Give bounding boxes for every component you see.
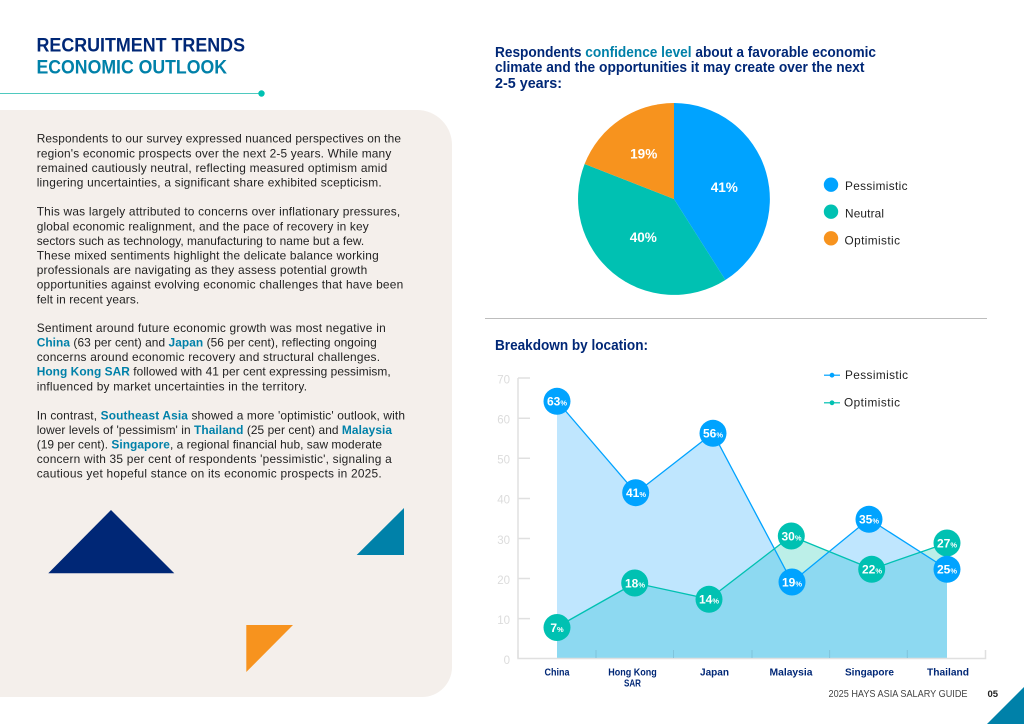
y axis labels: 10 <box>497 615 510 627</box>
y axis labels: 60 <box>497 414 510 426</box>
slice: optimistic 19% <box>585 103 674 199</box>
marker values: 63% <box>547 394 567 408</box>
area line chart <box>497 374 986 689</box>
marker values <box>547 394 957 635</box>
line: pessimistic <box>557 401 947 582</box>
marker values: 35% <box>859 512 879 526</box>
paragraph: southeast asia contrast: (19 per cent). Singapore, a regional financial hub, saw moderate <box>37 438 382 452</box>
pie value labels: 41% <box>711 180 738 195</box>
paragraph: most negative sentiment: China (63 per cent) and Japan (56 per cent), reflecting ongoing <box>37 336 377 350</box>
heading: pie chart question: Respondents confidence level about a favorable economic <box>495 45 876 61</box>
paragraph: survey overview <box>37 132 401 190</box>
x axis labels: Singapore <box>845 667 894 678</box>
paragraph: most negative sentiment: concerns around economic recovery and structural challenges. <box>37 350 380 364</box>
paragraph: causes of scepticism: These mixed sentiments highlight the delicate balance working <box>37 248 379 262</box>
title <box>36 36 245 78</box>
heading: pie chart question <box>495 45 876 92</box>
title rule with dot <box>0 90 265 97</box>
paragraph: southeast asia contrast: concern with 35 per cent of respondents 'pessimistic', signaling a <box>37 452 392 466</box>
paragraph: most negative sentiment: influenced by market uncertainties in the territory. <box>37 379 307 393</box>
marker values: 25% <box>937 562 957 576</box>
x axis labels: SAR <box>624 678 642 689</box>
paragraph: southeast asia contrast: In contrast, Southeast Asia showed a more 'optimistic' outlook, with <box>37 408 405 422</box>
y axis labels: 40 <box>497 494 510 506</box>
marker values: 19% <box>782 576 802 590</box>
slice: pessimistic 41% <box>674 103 770 280</box>
heading: pie chart question: 2-5 years: <box>495 76 562 92</box>
markers: optimistic <box>544 522 960 641</box>
pie legend: Pessimistic <box>845 179 908 193</box>
paragraph: causes of scepticism: felt in recent years. <box>37 292 139 306</box>
x axis labels: Hong Kong <box>608 667 657 678</box>
slice: neutral 40% <box>578 164 725 295</box>
paragraph: southeast asia contrast: lower levels of 'pessimism' in Thailand (25 per cent) and Malaysia <box>37 423 392 437</box>
axes <box>518 378 986 658</box>
paragraph: most negative sentiment <box>37 321 391 393</box>
x axis labels: Japan <box>700 667 729 678</box>
marker values: 22% <box>862 562 882 576</box>
paragraph: causes of scepticism: sectors such as technology, manufacturing to name but a few. <box>37 234 364 248</box>
marker values: 27% <box>937 536 957 550</box>
pie legend <box>824 178 908 248</box>
y axis labels: 70 <box>497 374 510 386</box>
paragraph: causes of scepticism: This was largely attributed to concerns over inflationary pressures, <box>37 205 400 219</box>
line chart legend: Optimistic <box>844 396 900 410</box>
paragraph: most negative sentiment: Sentiment around future economic growth was most negative in <box>37 321 386 335</box>
footer: 2025 HAYS ASIA SALARY GUIDE <box>828 689 968 700</box>
paragraph: causes of scepticism: professionals are navigating as they assess potential growth <box>37 263 367 277</box>
y axis labels: 30 <box>497 535 510 547</box>
paragraph: southeast asia contrast: cautious yet hopeful stance on its economic prospects in 2025. <box>37 467 382 481</box>
line: optimistic <box>557 536 947 627</box>
decorative triangle: navy <box>48 510 174 573</box>
x axis labels <box>544 667 969 689</box>
panel: narrative <box>0 110 452 697</box>
x axis labels: Thailand <box>927 667 969 678</box>
paragraph: survey overview: region's economic prospects over the next 2-5 years. While many <box>37 146 391 160</box>
marker values: 18% <box>625 576 645 590</box>
y axis labels: 20 <box>497 575 510 587</box>
paragraph: causes of scepticism: global economic realignment, and the pace of recovery in key <box>37 219 369 233</box>
area: overlap <box>557 550 947 658</box>
paragraph: causes of scepticism: opportunities against evolving economic challenges that have been <box>37 278 403 292</box>
marker values: 41% <box>626 486 646 500</box>
y axis labels <box>497 374 510 667</box>
paragraph: survey overview: lingering uncertainties, a significant share exhibited scepticism. <box>37 176 382 190</box>
heading: breakdown by location: Breakdown by location: <box>495 338 648 354</box>
markers: pessimistic <box>544 388 960 596</box>
paragraph: southeast asia contrast <box>37 408 405 481</box>
title: RECRUITMENT TRENDS <box>36 36 245 57</box>
pie value labels: 40% <box>630 230 657 245</box>
footer: 05 <box>988 689 999 700</box>
corner triangle <box>987 687 1024 724</box>
marker values: 7% <box>550 621 564 635</box>
decorative triangle: teal <box>357 508 404 555</box>
y axis labels: 50 <box>497 454 510 466</box>
line chart legend <box>824 368 908 410</box>
pie value labels: 19% <box>630 146 657 162</box>
paragraph: survey overview: remained cautiously neutral, reflecting measured optimism amid <box>37 161 387 175</box>
y axis labels: 0 <box>504 655 510 667</box>
heading: pie chart question: climate and the opportunities it may create over the next <box>495 60 865 76</box>
pie legend: Optimistic <box>844 234 900 248</box>
pie value labels <box>630 146 738 245</box>
marker values: 30% <box>781 530 802 544</box>
decorative triangle: orange <box>246 625 293 672</box>
title: ECONOMIC OUTLOOK <box>36 58 227 78</box>
marker values: 14% <box>699 592 719 606</box>
area: pessimistic <box>557 401 947 658</box>
marker values: 56% <box>703 426 723 440</box>
pie legend: Neutral <box>845 206 884 220</box>
pie chart <box>578 103 770 295</box>
x axis labels: China <box>544 667 570 678</box>
paragraph: causes of scepticism <box>37 205 403 306</box>
line chart legend: Pessimistic <box>845 368 908 382</box>
x axis labels: Malaysia <box>770 667 813 678</box>
area: optimistic <box>557 536 947 658</box>
paragraph: survey overview: Respondents to our survey expressed nuanced perspectives on the <box>37 132 401 146</box>
paragraph: most negative sentiment: Hong Kong SAR followed with 41 per cent expressing pessimism, <box>37 365 391 379</box>
